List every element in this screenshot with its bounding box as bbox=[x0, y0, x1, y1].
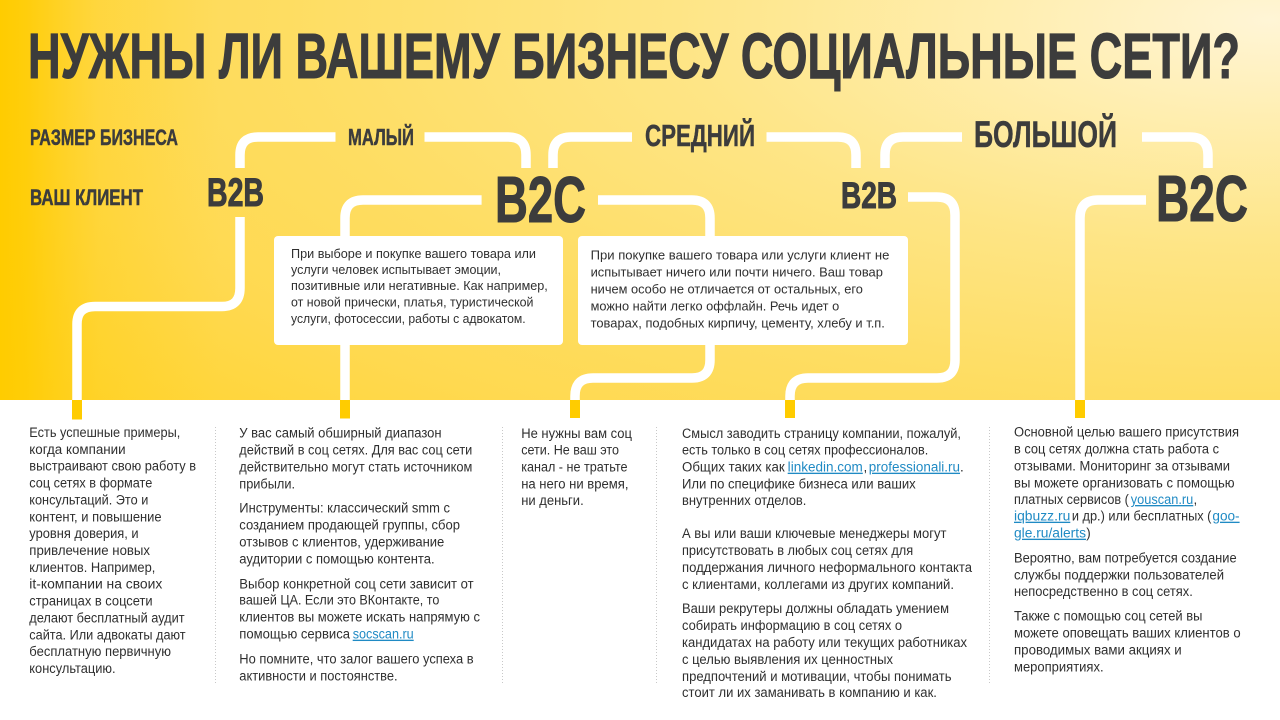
callout: emotional purchase: от новой прически, платья, туристической bbox=[291, 295, 534, 310]
text column: medium B2B: Ваши рекрутеры должны обладать умением bbox=[682, 601, 949, 616]
text column: large B2C bbox=[1014, 425, 1241, 675]
row labels: РАЗМЕР БИЗНЕСА bbox=[30, 125, 178, 150]
text column: small B2C: socscan.ru bbox=[353, 627, 414, 642]
text column: small B2C: помощью сервиса bbox=[239, 627, 351, 642]
text column: large B2C: , bbox=[1194, 492, 1197, 507]
text column: large B2C: gle.ru/alerts bbox=[1014, 526, 1086, 541]
text column: neutral B2C bbox=[521, 426, 632, 508]
size: large: БОЛЬШОЙ bbox=[974, 113, 1117, 155]
text column: neutral B2C: канал - не тратьте bbox=[521, 460, 628, 475]
text column: large B2C: goo- bbox=[1212, 509, 1240, 524]
text column: small B2C bbox=[239, 425, 480, 684]
text column: small B2C: клиентов вы можете искать напрямую с bbox=[239, 610, 480, 625]
text column: neutral B2C: ни деньги. bbox=[521, 493, 584, 508]
text column: medium B2B: предпочтений и мотивации, чтобы понимать bbox=[682, 669, 952, 684]
text column: small B2B: контент, и повышение bbox=[29, 509, 162, 524]
text column: small B2B: когда компании bbox=[29, 442, 126, 457]
text column: medium B2B: Или по специфике бизнеса или ваших bbox=[682, 477, 916, 492]
connector lines: business size to client type bbox=[240, 137, 1208, 168]
callout: neutral purchase: ничем особо не отличается от остальных, его bbox=[591, 282, 863, 297]
text column: large B2C: и др.) или бесплатных ( bbox=[1072, 509, 1212, 524]
callout: neutral purchase: товарах, подобных кирпичу, цементу, хлебу и т.п. bbox=[591, 315, 885, 330]
text column: large B2C: Основной целью вашего присутствия bbox=[1014, 425, 1239, 440]
text column: small B2B: привлечение новых bbox=[29, 543, 150, 558]
text column: small B2B: Есть успешные примеры, bbox=[29, 425, 180, 440]
text column: medium B2B: присутствовать в любых соц сетях для bbox=[682, 543, 913, 558]
callout: emotional purchase bbox=[274, 236, 563, 345]
text column: medium B2B: стоит ли их заманивать в компанию и как. bbox=[682, 685, 937, 700]
callout: neutral purchase: При покупке вашего товара или услуги клиент не bbox=[591, 248, 889, 263]
text column: small B2B bbox=[29, 425, 196, 676]
text column: small B2B: соц сетях в формате bbox=[29, 476, 152, 491]
text column: large B2C: Вероятно, вам потребуется создание bbox=[1014, 551, 1237, 566]
text column: small B2B: страницах в соцсети bbox=[29, 594, 153, 609]
text column: large B2C: мероприятиях. bbox=[1014, 660, 1104, 675]
row labels bbox=[30, 125, 178, 210]
callout: emotional purchase: позитивные или негативные. Как например, bbox=[291, 278, 548, 293]
text column: medium B2B: А вы или ваши ключевые менеджеры могут bbox=[682, 526, 946, 541]
text column: small B2C: действительно могут стать источником bbox=[239, 460, 472, 475]
text column: medium B2B: professionali.ru bbox=[869, 460, 960, 475]
client type: small B2B: B2B bbox=[207, 171, 264, 215]
text column: small B2B: консультаций. Это и bbox=[29, 492, 148, 507]
text column: large B2C: iqbuzz.ru bbox=[1014, 509, 1070, 524]
callout: emotional purchase: При выборе и покупке вашего товара или bbox=[291, 246, 536, 261]
callout: neutral purchase: испытывает ничего или почти ничего. Ваш товар bbox=[591, 265, 883, 280]
text column: small B2C: У вас самый обширный диапазон bbox=[239, 425, 442, 440]
text column: large B2C: ) bbox=[1086, 526, 1091, 541]
callout: neutral purchase: можно найти легко оффлайн. Речь идет о bbox=[591, 299, 839, 314]
callout: emotional purchase: услуги, фотосессии, работы с адвокатом. bbox=[291, 311, 526, 326]
text column: small B2B: it-компании на своих bbox=[29, 577, 163, 592]
text column: small B2C: отзывов с клиентов, удерживание bbox=[239, 535, 444, 550]
text column: small B2C: действий в соц сетях. Для вас соц сети bbox=[239, 443, 472, 458]
text column: medium B2B bbox=[682, 426, 973, 700]
text column: neutral B2C: на него ни время, bbox=[521, 477, 628, 492]
text column: small B2B: клиентов. Например, bbox=[29, 560, 155, 575]
text column: small B2C: активности и постоянстве. bbox=[239, 669, 398, 684]
column dividers bbox=[216, 427, 990, 685]
text column: medium B2B: Общих таких как bbox=[682, 460, 785, 475]
text column: small B2B: бесплатную первичную bbox=[29, 644, 171, 659]
text column: large B2C: непосредственно в соц сетях. bbox=[1014, 584, 1193, 599]
text column: small B2C: вашей ЦА. Если это ВКонтакте, то bbox=[239, 593, 439, 608]
text column: medium B2B: есть только в соц сетях профессионалов. bbox=[682, 443, 928, 458]
text column: small B2B: делают бесплатный аудит bbox=[29, 610, 185, 626]
size: medium: СРЕДНИЙ bbox=[645, 117, 755, 153]
client type: medium B2B: B2B bbox=[841, 175, 897, 216]
text column: large B2C: отзывами. Мониторинг за отзывами bbox=[1014, 459, 1230, 474]
text column: large B2C: Также с помощью соц сетей вы bbox=[1014, 609, 1202, 624]
text column: small B2C: Но помните, что залог вашего успеха в bbox=[239, 652, 474, 667]
text column: large B2C: можете оповещать ваших клиентов о bbox=[1014, 626, 1241, 641]
text column: small B2C: Выбор конкретной соц сети зависит от bbox=[239, 576, 474, 591]
text column: neutral B2C: сети. Не ваш это bbox=[521, 443, 619, 458]
text column: small B2C: прибыли. bbox=[239, 477, 295, 492]
text column: medium B2B: с клиентами, коллегами из других компаний. bbox=[682, 577, 954, 592]
text column: large B2C: в соц сетях должна стать работа с bbox=[1014, 442, 1219, 457]
text column: medium B2B: . bbox=[960, 460, 964, 475]
text column: medium B2B: поддержания личного неформального контакта bbox=[682, 560, 973, 575]
text column: medium B2B: внутренних отделов. bbox=[682, 493, 806, 508]
text column: medium B2B: кандидатах на работу или текущих работниках bbox=[682, 635, 967, 650]
text column: small B2B: консультацию. bbox=[29, 661, 116, 676]
size: small: МАЛЫЙ bbox=[348, 123, 414, 150]
text column: medium B2B: linkedin.com bbox=[788, 460, 863, 475]
yellow line end markers bbox=[72, 400, 1085, 420]
row labels: ВАШ КЛИЕНТ bbox=[30, 185, 143, 210]
callout: neutral purchase bbox=[578, 236, 908, 345]
text column: small B2C: созданием продающей группы, сбор bbox=[239, 518, 460, 533]
text column: large B2C: службы поддержки пользователей bbox=[1014, 568, 1224, 583]
text column: neutral B2C: Не нужны вам соц bbox=[521, 426, 632, 441]
text column: large B2C: проводимых вами акциях и bbox=[1014, 643, 1182, 658]
yellow gradient background bbox=[0, 0, 1280, 400]
text column: medium B2B: собирать информацию в соц сетях о bbox=[682, 618, 902, 633]
text column: large B2C: вы можете организовать с помощью bbox=[1014, 476, 1235, 491]
callout: emotional purchase: услуги человек испытывает эмоции, bbox=[291, 262, 501, 277]
text column: medium B2B: Смысл заводить страницу компании, пожалуй, bbox=[682, 426, 961, 441]
text column: large B2C: youscan.ru bbox=[1131, 492, 1193, 507]
text column: large B2C: платных сервисов ( bbox=[1014, 492, 1129, 507]
text column: medium B2B: с целью выявления их ценностных bbox=[682, 652, 893, 667]
text column: small B2C: аудитории с помощью контента. bbox=[239, 552, 435, 567]
connector lines: client type to advice columns bbox=[77, 197, 1146, 400]
text column: small B2B: уровня доверия, и bbox=[29, 526, 139, 541]
text column: small B2B: сайта. Или адвокаты дают bbox=[29, 627, 186, 642]
text column: small B2B: выстраивают свою работу в bbox=[29, 459, 196, 474]
client type: small B2C: B2C bbox=[495, 163, 586, 236]
text column: medium B2B: , bbox=[864, 460, 867, 475]
text column: small B2C: Инструменты: классический smm с bbox=[239, 501, 450, 516]
